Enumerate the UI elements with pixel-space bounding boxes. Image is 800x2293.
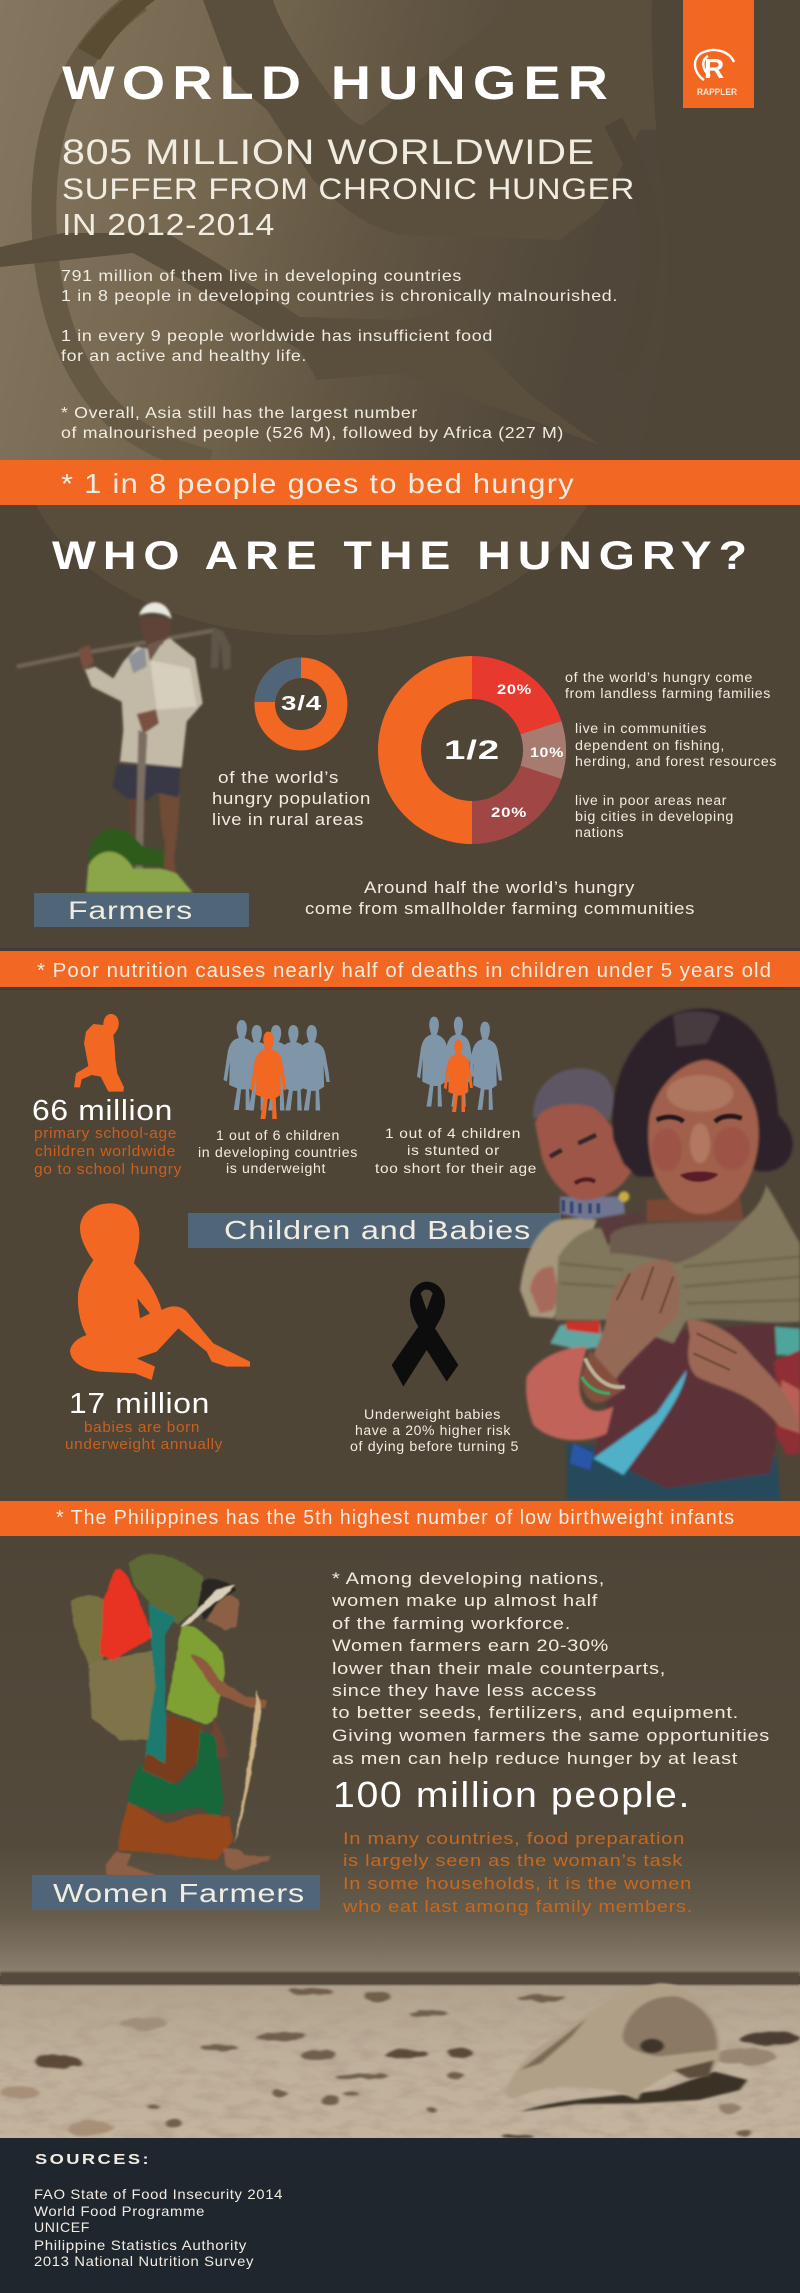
stat: 100 million people: 100 million people. — [333, 1774, 691, 1815]
logo: Rappler — [683, 0, 754, 108]
icon: running child — [74, 1014, 124, 1092]
logo: Rappler: RAPPLER — [697, 87, 737, 98]
text block: women farmers: as men can help reduce hunger by at least — [332, 1749, 738, 1768]
text block: women farmers — [331, 1569, 770, 1768]
label: Women Farmers — [32, 1875, 320, 1910]
illustration: woman farmer — [71, 1554, 271, 1879]
text block: statistics: for an active and healthy life. — [61, 348, 307, 365]
illustration: farmer — [17, 602, 231, 892]
text block: chart legend: herding, and forest resources — [575, 754, 777, 769]
logo: Rappler: R — [704, 53, 724, 84]
orange band: 1 in 8 — [0, 460, 800, 505]
stat: 17 million — [65, 1388, 223, 1453]
subtitle — [62, 133, 635, 242]
stat: 66 million: 66 million — [32, 1095, 173, 1127]
chart: 3/4 donut — [254, 657, 337, 740]
text block: women farmers: of the farming workforce. — [332, 1614, 571, 1633]
chart: 3/4 donut: 3/4 — [281, 693, 322, 715]
stat: 17 million: babies are born — [84, 1420, 200, 1436]
text block: smallholder communities: come from smallholder farming communities — [305, 899, 695, 918]
label: Children and Babies: Children and Babies — [224, 1215, 531, 1245]
text block: stunted: too short for their age — [375, 1160, 537, 1176]
text block: women farmers: Giving women farmers the same opportunities — [332, 1726, 770, 1745]
panel: sources: World Food Programme — [34, 2203, 205, 2219]
text block: women farmers: since they have less access — [332, 1681, 597, 1700]
stat: 17 million: 17 million — [69, 1388, 210, 1420]
orange band: 1 in 8: * 1 in 8 people goes to bed hungry — [61, 468, 575, 499]
text block: statistics: of malnourished people (526 M), followed by Africa (227 M) — [61, 425, 564, 442]
text block: rural areas: live in rural areas — [212, 810, 364, 829]
subtitle: 805 MILLION WORLDWIDE — [62, 133, 595, 172]
text block: chart legend — [565, 670, 777, 840]
orange band: Philippines — [0, 1501, 800, 1536]
text block: women farmers: women make up almost half — [331, 1591, 598, 1610]
text block: rural areas: of the world’s — [218, 768, 339, 787]
panel: sources: SOURCES: — [35, 2151, 151, 2168]
desert scene background — [0, 1536, 800, 2138]
stat: 66 million: children worldwide — [35, 1144, 176, 1160]
text block: food preparation: who eat last among family members. — [342, 1897, 693, 1916]
text block: chart legend: nations — [575, 825, 624, 840]
text block: chart legend: live in poor areas near — [575, 793, 727, 808]
illustration: ground rocks — [1, 1988, 800, 2138]
chart: 1/2 donut — [378, 656, 566, 844]
icon: sitting baby — [70, 1203, 250, 1380]
stat: 66 million — [32, 1095, 182, 1178]
label: Farmers: Farmers — [68, 897, 193, 925]
text block: chart legend: big cities in developing — [575, 809, 734, 824]
text block: women farmers: to better seeds, fertilizers, and equipment. — [332, 1703, 739, 1722]
heading: who are the hungry: WHO ARE THE HUNGRY? — [52, 534, 754, 578]
text block: underweight: is underweight — [226, 1161, 326, 1176]
text block: women farmers: * Among developing nations, — [332, 1569, 605, 1588]
stat: 66 million: primary school-age — [34, 1126, 177, 1142]
panel: sources: Philippine Statistics Authority — [34, 2237, 247, 2253]
text block: statistics — [61, 268, 618, 442]
label: Children and Babies — [188, 1213, 561, 1248]
lower circle of hero artwork — [36, 505, 587, 635]
text block: stunted — [375, 1125, 537, 1176]
panel: sources: 2013 National Nutrition Survey — [34, 2253, 254, 2269]
icon: group of four children — [417, 1017, 502, 1112]
text block: food preparation — [342, 1829, 693, 1916]
text block: chart legend: of the world’s hungry come — [565, 670, 753, 685]
text block: underweight: in developing countries — [198, 1145, 358, 1160]
icon: black ribbon — [392, 1282, 458, 1387]
text block: chart legend: from landless farming families — [565, 686, 771, 701]
subtitle: SUFFER FROM CHRONIC HUNGER — [62, 173, 635, 206]
text block: underweight — [198, 1128, 358, 1176]
text block: food preparation: is largely seen as the woman’s task — [343, 1851, 683, 1870]
text block: rural areas — [212, 768, 371, 829]
text block: stunted: is stunted or — [407, 1142, 500, 1158]
text block: chart legend: live in communities — [575, 721, 707, 736]
panel: sources: UNICEF — [34, 2219, 90, 2235]
panel: sources: FAO State of Food Insecurity 2014 — [34, 2186, 283, 2202]
text block: food preparation: In many countries, food preparation — [343, 1829, 685, 1848]
orange band: poor nutrition — [0, 948, 800, 990]
text block: chart legend: dependent on fishing, — [575, 738, 725, 753]
text block: stunted: 1 out of 4 children — [385, 1125, 521, 1141]
text block: rural areas: hungry population — [212, 789, 371, 808]
chart: 1/2 donut: 20% — [497, 681, 532, 697]
text block: statistics: 791 million of them live in developing countries — [61, 268, 462, 285]
subtitle: IN 2012-2014 — [62, 207, 275, 242]
panel: sources — [0, 2138, 800, 2293]
text block: underweight babies: of dying before turning 5 — [350, 1439, 519, 1454]
text block: underweight babies: have a 20% higher risk — [355, 1423, 511, 1438]
stat: 17 million: underweight annually — [65, 1437, 223, 1453]
text block: underweight babies: Underweight babies — [364, 1407, 501, 1422]
text block: underweight: 1 out of 6 children — [216, 1128, 340, 1143]
title: WORLD HUNGER — [62, 56, 615, 109]
chart: 1/2 donut: 10% — [530, 744, 564, 760]
label: Farmers — [34, 893, 249, 927]
text block: women farmers: Women farmers earn 20-30% — [332, 1636, 609, 1655]
hero background artwork — [0, 0, 800, 462]
text block: smallholder communities: Around half the world’s hungry — [364, 878, 635, 897]
text block: statistics: 1 in 8 people in developing countries is chronically malnourished. — [61, 288, 618, 305]
text block: women farmers: lower than their male counterparts, — [332, 1659, 666, 1678]
illustration: animal skull — [505, 1983, 747, 2112]
orange band: Philippines: * The Philippines has the 5th highest number of low birthweight infants — [56, 1507, 735, 1529]
text block: food preparation: In some households, it is the women — [343, 1874, 692, 1893]
label: Women Farmers: Women Farmers — [53, 1878, 305, 1908]
photo illustration: girl carrying baby — [520, 1008, 800, 1500]
stat: 66 million: go to school hungry — [34, 1162, 182, 1178]
chart: 1/2 donut: 1/2 — [444, 735, 500, 765]
orange band: poor nutrition: * Poor nutrition causes nearly half of deaths in children under 5 years old — [37, 960, 772, 982]
text block: underweight babies — [350, 1407, 519, 1454]
text block: smallholder communities — [305, 878, 695, 918]
icon: group of six children — [224, 1020, 330, 1119]
text block: statistics: 1 in every 9 people worldwide has insufficient food — [61, 328, 493, 345]
chart: 1/2 donut: 20% — [491, 804, 527, 820]
text block: statistics: * Overall, Asia still has the largest number — [61, 405, 418, 422]
